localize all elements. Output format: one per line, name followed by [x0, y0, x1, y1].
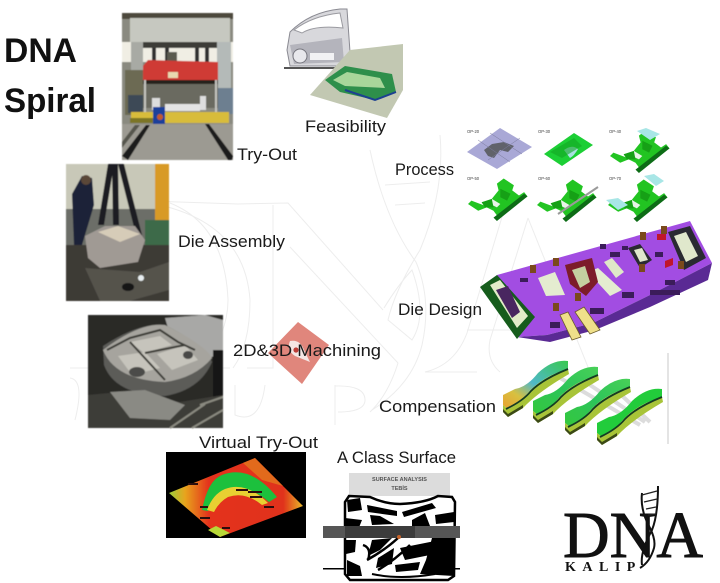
icon: red diamond with white teardrop — [268, 322, 329, 384]
surface analysis header: TEBİS — [391, 485, 408, 492]
surface analysis header — [349, 473, 450, 496]
label: Process: Process — [395, 160, 454, 179]
watermark: DNA Kalip logo outline — [70, 135, 590, 425]
label: Compensation: Compensation — [379, 397, 496, 416]
stage OP-40 — [609, 128, 670, 173]
photo: die assembly — [66, 164, 169, 301]
stage OP-50 — [467, 176, 528, 221]
chart: compensation strips — [503, 353, 668, 445]
chart: A class surface analysis — [323, 473, 460, 580]
stamping sheet — [310, 44, 403, 118]
chart: virtual try-out simulation — [166, 452, 306, 538]
helix — [640, 486, 658, 568]
label: A Class Surface: A Class Surface — [337, 448, 456, 467]
stage OP-20 — [467, 128, 532, 169]
logo: DNA Kalip: DNA — [563, 499, 703, 572]
photo: machining table — [88, 315, 223, 428]
zebra surface pattern — [345, 496, 455, 580]
logo: DNA Kalip: KALIP — [565, 560, 642, 575]
surface analysis header: SURFACE ANALYSIS — [372, 477, 427, 483]
image: door feasibility model — [284, 9, 403, 118]
stage OP-60: OP-60 — [538, 176, 551, 181]
stage OP-70 — [606, 174, 668, 222]
chart: process operation stages — [467, 128, 670, 222]
stage OP-30: OP-30 — [538, 129, 551, 134]
label: Die Design: Die Design — [398, 300, 482, 319]
label: Die Assembly: Die Assembly — [178, 232, 286, 251]
stage OP-40: OP-40 — [609, 129, 622, 134]
stage OP-20: OP-20 — [467, 129, 480, 134]
label: 2D&3D Machining: 2D&3D Machining — [233, 341, 381, 360]
stage OP-60 — [537, 176, 598, 222]
stage OP-30 — [538, 129, 593, 166]
label: Virtual Try-Out: Virtual Try-Out — [199, 433, 318, 452]
label: Feasibility: Feasibility — [305, 117, 387, 136]
strip shadows — [555, 375, 650, 425]
stage OP-70: OP-70 — [609, 176, 622, 181]
stage OP-50: OP-50 — [467, 176, 480, 181]
image: die design 3D model — [480, 221, 712, 342]
title: DNA Spiral: Spiral — [4, 82, 96, 120]
photo: try-out press — [122, 13, 233, 160]
title: DNA Spiral: DNA — [4, 32, 77, 70]
gray band — [323, 526, 460, 538]
door panel — [287, 9, 350, 66]
label: Try-Out: Try-Out — [237, 145, 297, 164]
title: DNA Spiral — [4, 32, 96, 120]
